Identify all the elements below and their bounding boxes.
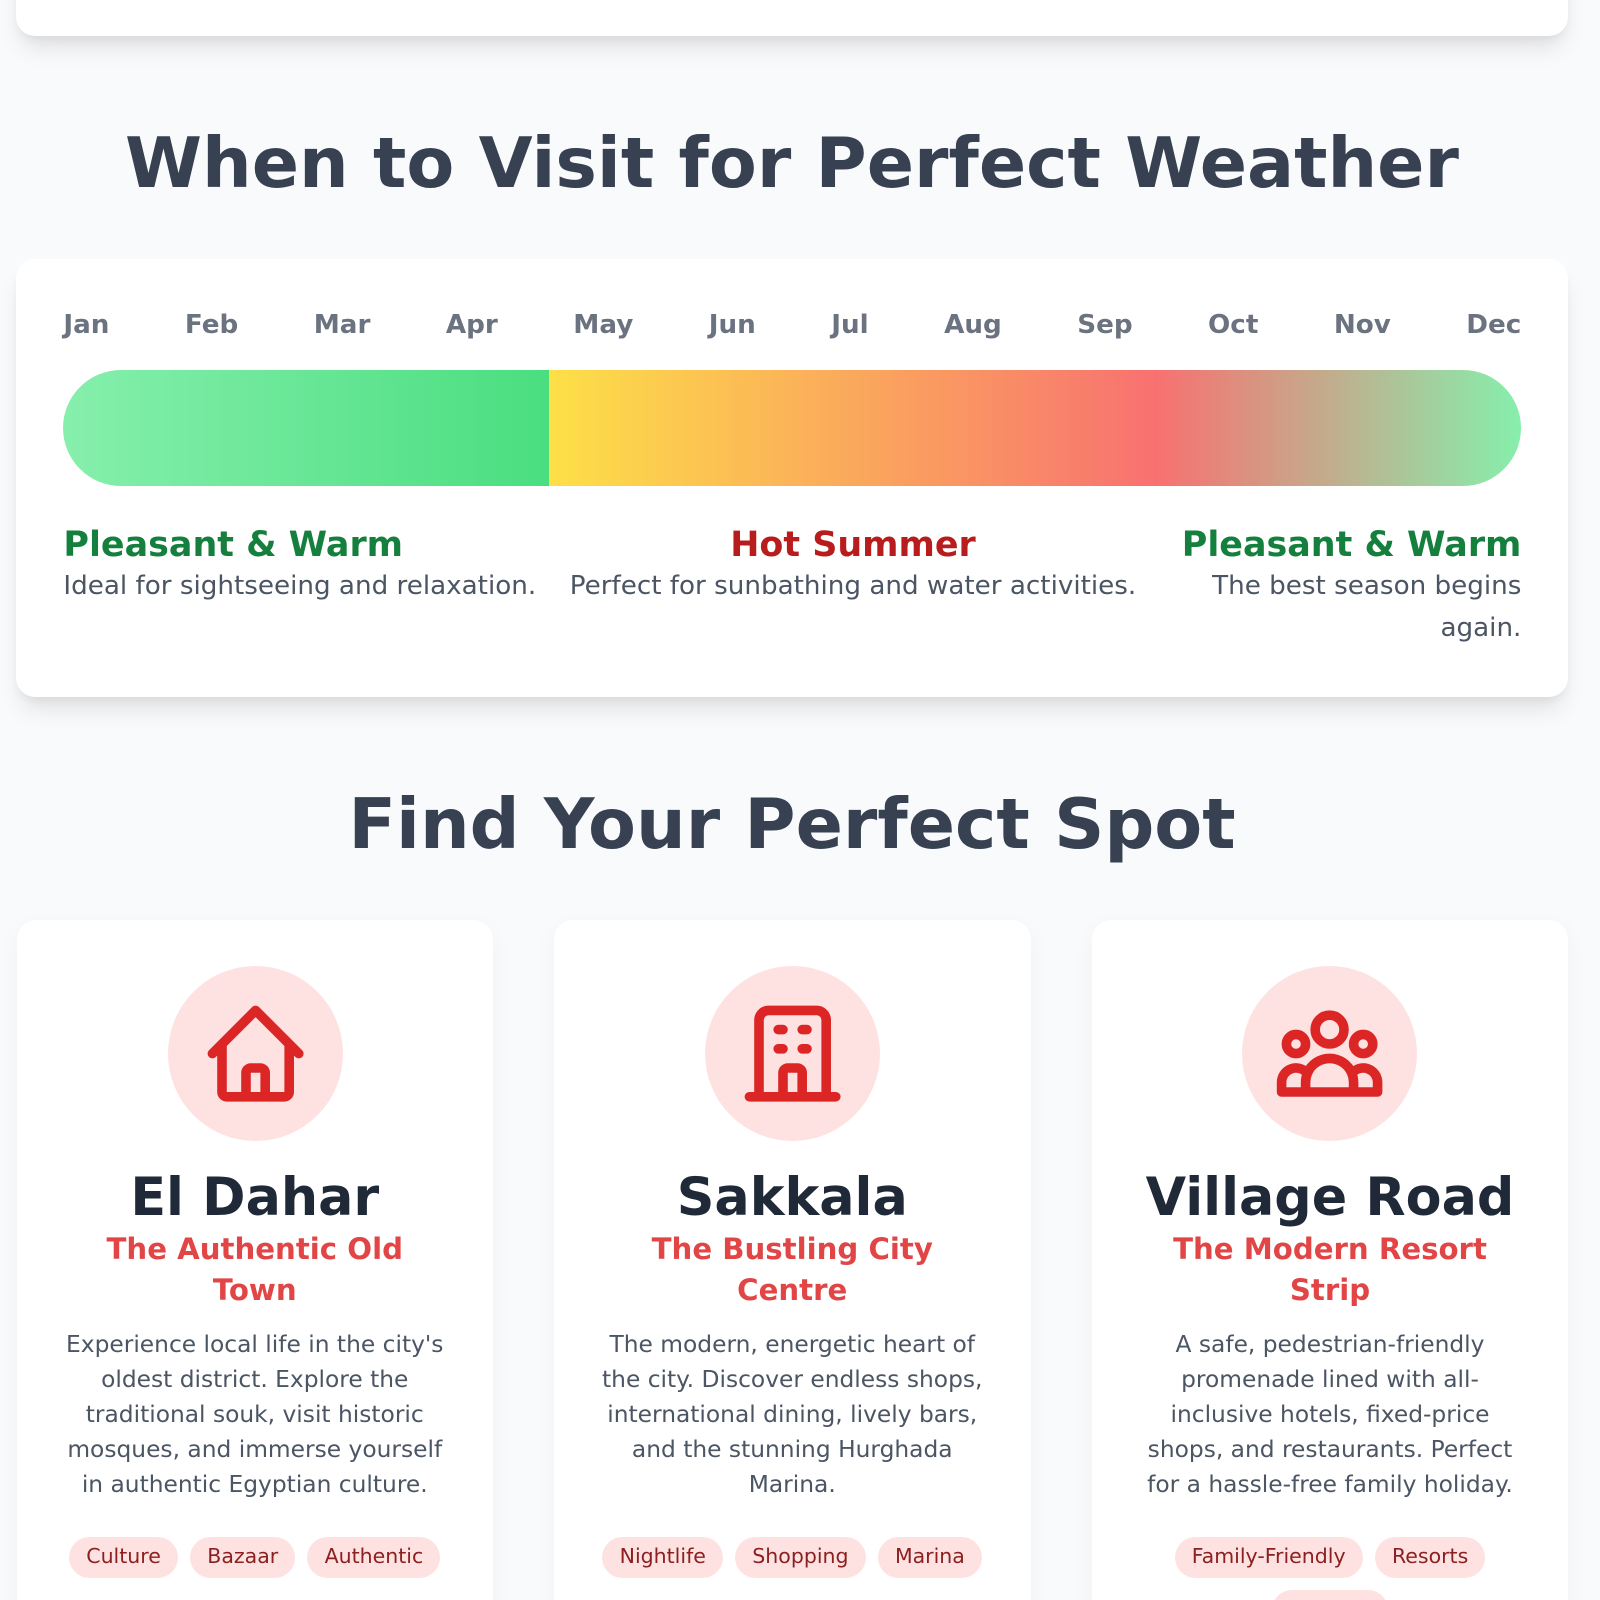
tags xyxy=(69,1537,440,1578)
panel: Village Road xyxy=(1092,920,1568,1600)
area description: Marina. xyxy=(749,1470,836,1498)
season: pleasant and warm, autumn: Pleasant & Warm xyxy=(1182,524,1521,564)
area tagline: Town xyxy=(213,1273,297,1307)
heading: when to visit: When to Visit for Perfect Weather xyxy=(125,123,1459,204)
season: pleasant and warm, spring: Pleasant & Warm xyxy=(63,524,403,564)
month labels: Apr xyxy=(446,310,498,340)
panel: weather timeline xyxy=(16,259,1568,697)
area description: and the stunning Hurghada xyxy=(632,1435,953,1463)
area description xyxy=(1147,1330,1513,1498)
icon: user group xyxy=(1242,966,1417,1141)
month labels: May xyxy=(573,310,633,340)
area description: inclusive hotels, fixed-price xyxy=(1170,1400,1490,1428)
season: hot summer: Hot Summer xyxy=(730,524,976,564)
area tagline: The Modern Resort xyxy=(1173,1232,1487,1266)
area tagline: The Bustling City xyxy=(652,1232,933,1266)
area description: oldest district. Explore the xyxy=(101,1365,408,1393)
month labels: Feb xyxy=(185,310,238,340)
seasonal gradient bar xyxy=(63,370,1521,486)
area description: The modern, energetic heart of xyxy=(609,1330,975,1358)
season: hot summer: Perfect for sunbathing and water activities. xyxy=(570,571,1136,601)
area description xyxy=(66,1330,443,1498)
tags xyxy=(1175,1537,1485,1600)
area name: Village Road xyxy=(1146,1167,1514,1228)
season: pleasant and warm, spring: Ideal for sightseeing and relaxation. xyxy=(63,571,536,601)
area description: Experience local life in the city's xyxy=(66,1330,443,1358)
tags: Shopping xyxy=(752,1544,849,1568)
season: hot summer xyxy=(570,524,1136,601)
area description: for a hassle-free family holiday. xyxy=(1147,1470,1513,1498)
month labels: Dec xyxy=(1466,310,1521,340)
season: pleasant and warm, autumn: The best season begins xyxy=(1212,571,1521,601)
area name: Sakkala xyxy=(677,1167,908,1228)
panel: Sakkala xyxy=(554,920,1030,1600)
season: pleasant and warm, autumn xyxy=(1182,524,1521,643)
area description xyxy=(602,1330,982,1498)
season: pleasant and warm, autumn: again. xyxy=(1440,613,1521,643)
tags: Resorts xyxy=(1392,1544,1468,1568)
month labels: Mar xyxy=(314,310,370,340)
tags: Marina xyxy=(895,1544,965,1568)
icon: office building xyxy=(705,966,880,1141)
month labels: Oct xyxy=(1208,310,1258,340)
area tagline xyxy=(652,1232,933,1307)
area description: shops, and restaurants. Perfect xyxy=(1148,1435,1512,1463)
tags: Family-Friendly xyxy=(1192,1544,1346,1568)
area tagline xyxy=(106,1232,403,1307)
area tagline xyxy=(1173,1232,1487,1307)
area description: mosques, and immerse yourself xyxy=(67,1435,442,1463)
area tagline: The Authentic Old xyxy=(107,1232,403,1266)
area name: El Dahar xyxy=(130,1167,379,1228)
tags: Authentic xyxy=(325,1544,423,1568)
month labels: Jul xyxy=(831,310,869,340)
area description: in authentic Egyptian culture. xyxy=(82,1470,428,1498)
season: pleasant and warm, spring xyxy=(63,524,536,601)
month labels: Aug xyxy=(944,310,1002,340)
area tagline: Centre xyxy=(737,1273,847,1307)
month labels: Jun xyxy=(709,310,756,340)
heading: find your spot: Find Your Perfect Spot xyxy=(348,784,1236,865)
area description: international dining, lively bars, xyxy=(607,1400,977,1428)
month labels xyxy=(62,310,1521,340)
month labels: Nov xyxy=(1334,310,1391,340)
area description: the city. Discover endless shops, xyxy=(602,1365,982,1393)
icon: home xyxy=(168,966,343,1141)
panel: previous section card (cropped at top) xyxy=(16,0,1568,36)
tags: Culture xyxy=(86,1544,161,1568)
area description: promenade lined with all- xyxy=(1181,1365,1479,1393)
area tagline: Strip xyxy=(1290,1273,1370,1307)
area description: traditional souk, visit historic xyxy=(86,1400,424,1428)
tags xyxy=(602,1537,982,1578)
month labels: Sep xyxy=(1077,310,1133,340)
area description: A safe, pedestrian-friendly xyxy=(1176,1330,1484,1358)
tags: Nightlife xyxy=(620,1544,706,1568)
month labels: Jan xyxy=(63,310,109,340)
panel: El Dahar xyxy=(16,920,493,1600)
tags: Bazaar xyxy=(207,1544,278,1568)
